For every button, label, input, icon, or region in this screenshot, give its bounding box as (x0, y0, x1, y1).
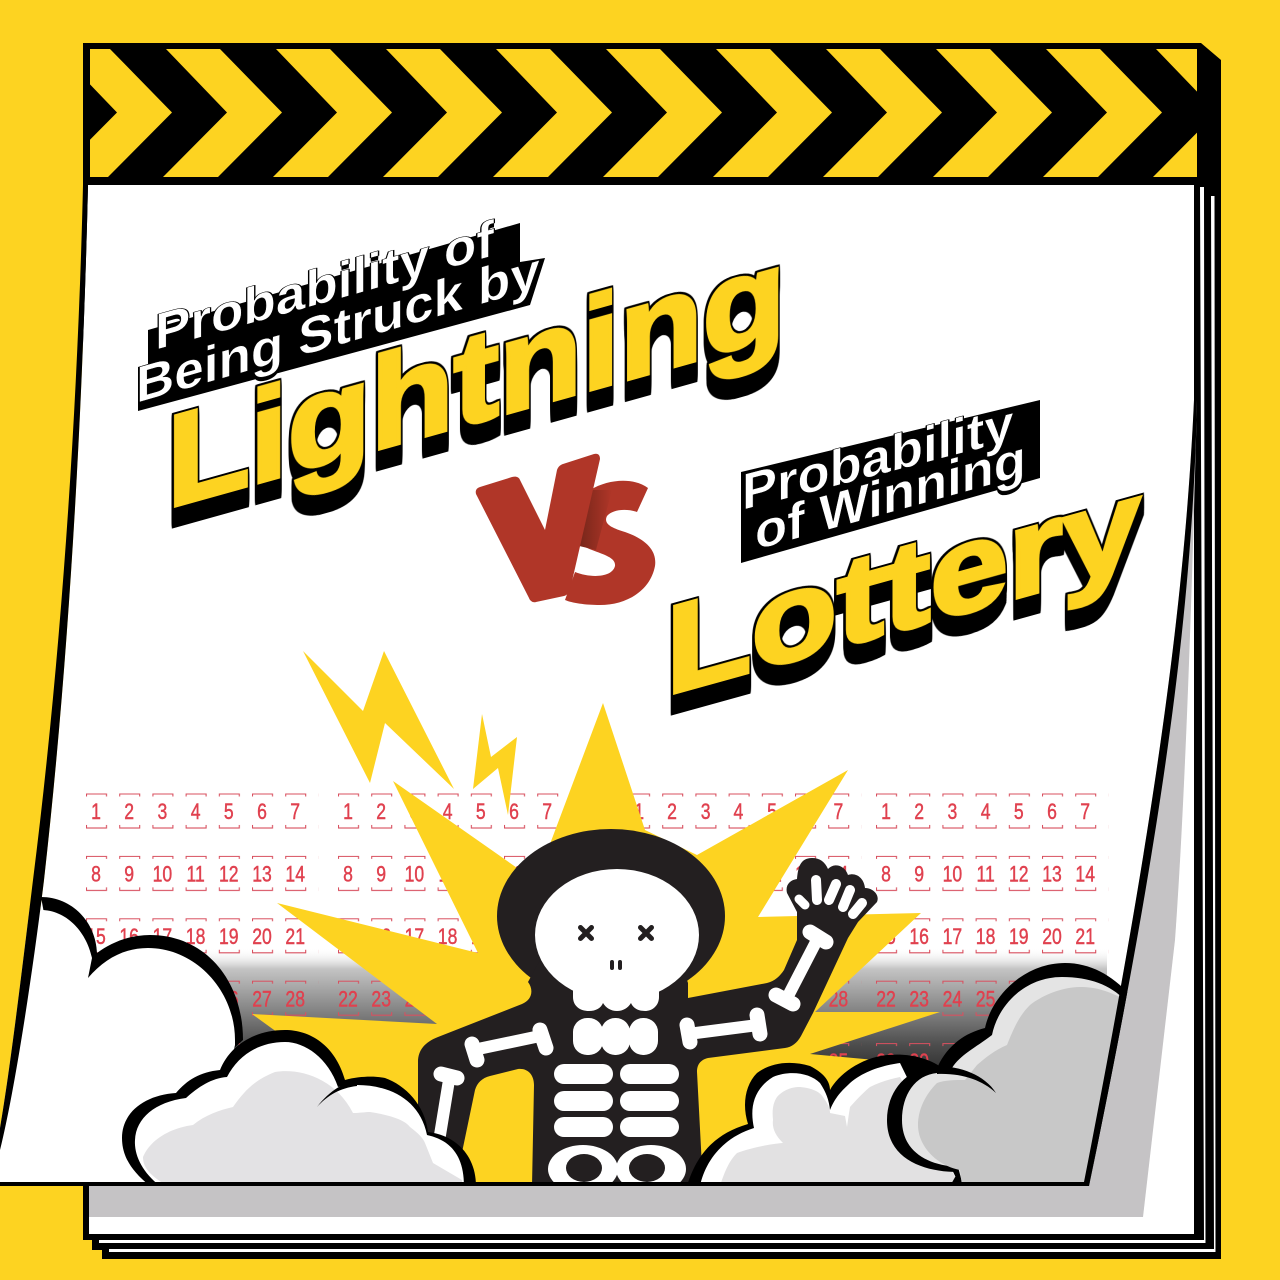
calendar month 1: 27 (252, 988, 272, 1012)
front-left cloud (122, 1030, 476, 1186)
calendar month 4: 15 (876, 925, 896, 950)
calendar month 1: 7 (290, 800, 300, 825)
calendar month 4: 12 (1009, 863, 1029, 887)
calendar month 3: 23 (662, 988, 682, 1012)
heading: Probability: Probability (742, 394, 1013, 521)
calendar month 2: 20 (504, 925, 524, 950)
calendar month 4: 24 (943, 988, 962, 1012)
calendar month 4: 4 (981, 800, 990, 825)
calendar month 2: 11 (438, 863, 457, 887)
calendar month 4: 9 (914, 863, 924, 887)
calendar month 3: 25 (729, 988, 748, 1012)
calendar month 1: 6 (257, 800, 267, 825)
calendar month 1: 13 (252, 863, 272, 887)
calendar month 1: 18 (186, 925, 205, 950)
calendar month 3: 13 (795, 863, 815, 887)
calendar month 2: 23 (371, 988, 391, 1012)
calendar month 1: 8 (91, 863, 101, 887)
calendar month 4: 26 (1009, 988, 1029, 1012)
dark smoke gradient behind calendar (208, 956, 1107, 1066)
calendar month 3: 19 (762, 925, 782, 950)
calendar month 1: 2 (124, 800, 134, 825)
calendar month 1: 1 (91, 800, 101, 825)
calendar month 2: 21 (537, 925, 557, 950)
front calendar page (0, 185, 1194, 1182)
calendar month 1: 22 (86, 988, 106, 1012)
calendar month 3: 18 (729, 925, 748, 950)
calendar month 1: 5 (224, 800, 234, 825)
calendar month 1: 15 (86, 925, 106, 950)
calendar month 4: 20 (1042, 925, 1062, 950)
calendar month 1: 11 (186, 863, 205, 887)
calendar month 3: 25 (829, 1050, 848, 1075)
calendar month 4: 17 (943, 925, 962, 950)
grey shaded back page (89, 400, 1197, 1217)
calendar month 3: 2 (667, 800, 677, 825)
front-right grey cloud (887, 963, 1130, 1186)
calendar month 4: 6 (1047, 800, 1057, 825)
calendar month 4 (876, 800, 1095, 1075)
calendar month 2: 16 (371, 925, 391, 950)
calendar month 1: 16 (119, 925, 139, 950)
illustration clipped to the front page (0, 651, 1130, 1193)
calendar month 2: 13 (504, 863, 524, 887)
calendar month 4: 29 (876, 1050, 896, 1075)
calendar month 3: 9 (667, 863, 677, 887)
heading: of Winning: of Winning (755, 429, 1026, 561)
skull eyes and nose (580, 928, 652, 968)
calendar month 3: 21 (829, 925, 848, 950)
calendar month 4: 30 (909, 1050, 929, 1075)
calendar month 3: 4 (734, 800, 743, 825)
calendar month 1: 10 (153, 863, 172, 887)
calendar month 1: 25 (186, 988, 205, 1012)
calendar month 3: 8 (634, 863, 644, 887)
calendar month 1: 14 (285, 863, 305, 887)
icon: red VS mark (476, 454, 655, 605)
pelvis (548, 1145, 686, 1182)
calendar month 4: 22 (876, 988, 896, 1012)
calendar month 1: 17 (153, 925, 172, 950)
calendar month 3: 20 (795, 925, 815, 950)
calendar month 2 (338, 800, 557, 1012)
calendar month 1: 20 (252, 925, 272, 950)
calendar month 3: 12 (762, 863, 782, 887)
yellow explosion burst (252, 703, 940, 1186)
skeleton character (418, 829, 878, 1193)
calendar month 3: 17 (696, 925, 715, 950)
chest and ribs (554, 1018, 679, 1137)
icon: lightning bolts (303, 651, 517, 815)
calendar month 1: 28 (285, 988, 305, 1012)
calendar month 4: 11 (976, 863, 995, 887)
heading: Being Struck by: Being Struck by (136, 241, 540, 414)
calendar month 3: 11 (729, 863, 748, 887)
date brackets (86, 794, 1108, 1046)
calendar month 4: 2 (914, 800, 924, 825)
calendar month 1: 24 (153, 988, 172, 1012)
calendar month 1: 23 (119, 988, 139, 1012)
calendar month 2: 9 (376, 863, 386, 887)
subtitle backing: lightning (138, 223, 545, 411)
calendar month 4: 5 (1014, 800, 1024, 825)
calendar month 3: 14 (829, 863, 848, 887)
calendar month 3: 5 (767, 800, 777, 825)
hand finger bones (799, 880, 862, 914)
calendar month 2: 8 (343, 863, 353, 887)
calendar month 4: 7 (1080, 800, 1090, 825)
calendar month 3: 3 (701, 800, 710, 825)
calendar month 2: 26 (471, 988, 491, 1012)
calendar month 4: 25 (976, 988, 995, 1012)
calendar month 3: 24 (696, 988, 715, 1012)
calendar month 2: 12 (471, 863, 491, 887)
calendar month 3: 26 (762, 988, 782, 1012)
calendar month 4: 14 (1075, 863, 1095, 887)
calendar month 2: 17 (405, 925, 424, 950)
calendar month 3: 28 (829, 988, 848, 1012)
calendar month 4: 28 (1075, 988, 1095, 1012)
calendar month 3: 15 (629, 925, 649, 950)
calendar month 4: 16 (909, 925, 929, 950)
middle-right cloud (687, 1055, 960, 1186)
calendar month 4: 27 (1042, 988, 1062, 1012)
calendar month 2: 14 (537, 863, 557, 887)
calendar month 4: 3 (948, 800, 957, 825)
calendar month 2: 27 (504, 988, 524, 1012)
calendar month 1: 4 (191, 800, 200, 825)
calendar month 2: 1 (343, 800, 353, 825)
back-left cloud (0, 897, 243, 1150)
calendar month 3: 16 (662, 925, 682, 950)
calendar month 1: 19 (219, 925, 239, 950)
calendar month 2: 7 (542, 800, 552, 825)
calendar month 2: 10 (405, 863, 424, 887)
subtitle backing: lottery (741, 400, 1040, 563)
heading: Probability of: Probability of (155, 209, 494, 361)
calendar month 2: 22 (338, 988, 358, 1012)
calendar month 1 (86, 800, 305, 1012)
calendar month 3: 1 (634, 800, 644, 825)
calendar month 2: 28 (537, 988, 557, 1012)
heading: Lottery: Lottery (666, 451, 1140, 722)
skeleton body silhouette (418, 829, 878, 1186)
calendar month 2: 24 (405, 988, 424, 1012)
calendar month 1: 26 (219, 988, 239, 1012)
calendar month 3: 10 (696, 863, 715, 887)
calendar month 3: 22 (629, 988, 649, 1012)
calendar month 2: 25 (438, 988, 457, 1012)
calendar month 2: 2 (376, 800, 386, 825)
heading: Lightning: Lightning (167, 217, 786, 536)
calendar month 1: 3 (158, 800, 167, 825)
calendar month 3: 7 (834, 800, 843, 825)
arm bones (440, 932, 826, 1135)
calendar month 4: 8 (881, 863, 891, 887)
calendar month 4: 18 (976, 925, 995, 950)
calendar month 3: 6 (800, 800, 810, 825)
front page black outline (0, 185, 1197, 1186)
calendar month 4: 21 (1075, 925, 1095, 950)
calendar month 4: 1 (881, 800, 891, 825)
calendar month 2: 18 (438, 925, 457, 950)
calendar month 2: 5 (476, 800, 486, 825)
calendar month 2: 19 (471, 925, 491, 950)
chevron header band (90, 49, 1197, 177)
calendar grids (86, 794, 1108, 1060)
calendar month 4: 19 (1009, 925, 1029, 950)
calendar month 1: 12 (219, 863, 239, 887)
calendar month 1: 9 (124, 863, 134, 887)
calendar month 2: 15 (338, 925, 358, 950)
calendar month 4: 10 (943, 863, 962, 887)
calendar month 4: 13 (1042, 863, 1062, 887)
calendar month 3: 27 (795, 988, 815, 1012)
calendar month 1: 21 (285, 925, 305, 950)
skull (535, 869, 699, 1011)
calendar month 2: 6 (509, 800, 519, 825)
calendar month 3 (636, 803, 848, 1057)
calendar month 4: 23 (909, 988, 929, 1012)
calendar month 2: 3 (410, 800, 419, 825)
calendar month 2: 4 (443, 800, 452, 825)
